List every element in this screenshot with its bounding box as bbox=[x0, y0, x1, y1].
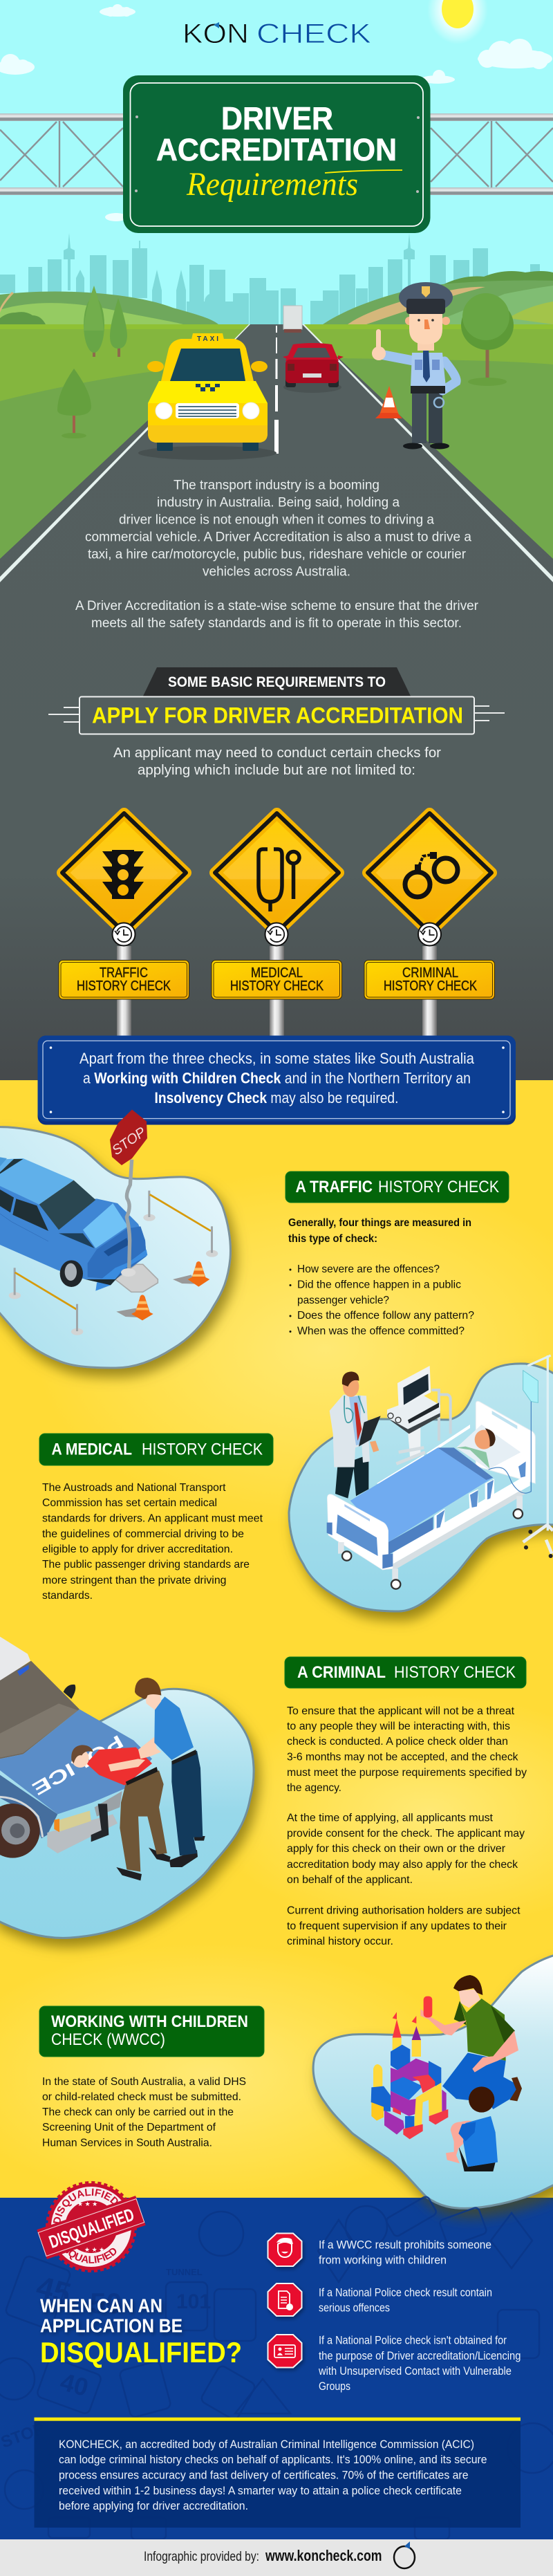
icon: document in stop octagon bbox=[268, 2283, 301, 2316]
footer: www.koncheck.com bbox=[265, 2547, 382, 2564]
criminal check text: apply for this check on their own or the driver bbox=[287, 1843, 506, 1855]
heading: working with children check bbox=[39, 2006, 264, 2057]
checks intro text bbox=[113, 745, 441, 778]
logo bbox=[182, 19, 371, 49]
traffic check text bbox=[288, 1217, 474, 1337]
heading: working with children check: WORKING WITH CHILDREN bbox=[51, 2012, 248, 2031]
plaque: medical history check: HISTORY CHECK bbox=[230, 979, 324, 994]
truck bbox=[283, 306, 302, 333]
disqualification reason 3: If a National Police check isn't obtained for bbox=[319, 2335, 507, 2347]
blue car bbox=[0, 1157, 147, 1291]
disqualification reason 1 bbox=[268, 2234, 491, 2266]
stamp banner: DISQUALIFIED bbox=[46, 2204, 137, 2252]
clock badge bbox=[112, 923, 135, 946]
intro text: The transport industry is a booming bbox=[174, 479, 379, 492]
disqualification reason 3: the purpose of Driver accreditation/Licencing bbox=[319, 2350, 521, 2362]
traffic check text: How severe are the offences? bbox=[297, 1263, 440, 1275]
criminal check text: the agency. bbox=[287, 1782, 341, 1794]
intro text bbox=[75, 479, 479, 631]
disqualified stamp: DISQUALIFIED bbox=[65, 2248, 116, 2263]
icon: traffic light bbox=[102, 850, 144, 899]
plaque: traffic history check: HISTORY CHECK bbox=[77, 979, 171, 994]
heading: medical history check bbox=[39, 1434, 273, 1465]
policeman bbox=[372, 282, 456, 450]
heading: some basic requirements: SOME BASIC REQUIREMENTS TO bbox=[168, 674, 386, 690]
scene: hospital bbox=[327, 1355, 553, 1589]
criminal check text: must meet the purpose requirements specified by bbox=[287, 1767, 527, 1779]
stop sign bbox=[109, 1109, 149, 1165]
hospital bed bbox=[327, 1401, 535, 1589]
sun bbox=[427, 0, 488, 44]
heading: apply for driver accreditation: APPLY FOR DRIVER ACCREDITATION bbox=[92, 703, 463, 728]
disqualification reason 1: from working with children bbox=[319, 2254, 447, 2266]
disqualification reason 2: If a National Police check result contain bbox=[319, 2286, 492, 2299]
heading: when can an application be disqualified: APPLICATION BE bbox=[40, 2315, 182, 2336]
medical check text: more stringent than the private driving bbox=[42, 1575, 227, 1586]
footer: Infographic provided by: bbox=[144, 2550, 259, 2564]
blue section background bbox=[0, 2198, 553, 2539]
banner text: Insolvency Check may also be required. bbox=[155, 1089, 398, 1106]
intro text: commercial vehicle. A Driver Accreditation is also a must to drive a bbox=[85, 530, 471, 545]
scene: police arrest bbox=[0, 1637, 205, 1880]
traffic check text: Generally, four things are measured in bbox=[288, 1217, 471, 1229]
title line: accreditation: ACCREDITATION bbox=[156, 132, 397, 167]
koncheck info panel bbox=[35, 2418, 521, 2528]
highway gantry truss bbox=[0, 113, 553, 195]
medical check text: The public passenger driving standards are bbox=[42, 1559, 250, 1570]
banner text bbox=[79, 1050, 475, 1106]
police car bbox=[0, 1637, 152, 1858]
taxi roof label: TAXI bbox=[197, 335, 218, 343]
barrier front bbox=[9, 1268, 83, 1335]
sign posts bbox=[117, 946, 437, 1036]
taxi bbox=[138, 333, 276, 460]
plaque: traffic history check: TRAFFIC bbox=[100, 965, 148, 981]
title sign bbox=[123, 75, 430, 233]
scene: crashed car bbox=[0, 1157, 218, 1335]
criminal blob bbox=[0, 1689, 254, 1938]
child bbox=[446, 2086, 498, 2171]
faint sign numbers bbox=[0, 2267, 211, 2452]
disqualification reason 2 bbox=[268, 2283, 492, 2316]
heading: when can an application be disqualified bbox=[40, 2295, 242, 2369]
children check text: The check can only be carried out in the bbox=[42, 2106, 234, 2118]
title line: driver: DRIVER bbox=[221, 100, 333, 136]
road sign pattern in blue section bbox=[0, 2196, 553, 2539]
stamp stars: ★ ★ ★ bbox=[84, 2246, 104, 2253]
barrier back bbox=[143, 1191, 218, 1257]
medical check text: Commission has set certain medical bbox=[42, 1497, 217, 1509]
criminal check text: criminal history occur. bbox=[287, 1936, 393, 1947]
faint sign numbers: 101 bbox=[176, 2290, 211, 2313]
faint sign numbers: 40 bbox=[57, 2367, 91, 2402]
medical check text: The Austroads and National Transport bbox=[42, 1482, 226, 1494]
building blocks castle bbox=[371, 2012, 448, 2139]
stamp stars: ★ ★ ★ bbox=[77, 2200, 97, 2207]
medical check text: the guidelines of commercial driving to be bbox=[42, 1528, 244, 1540]
heading: apply for driver accreditation bbox=[48, 697, 505, 734]
disqualification reason 2: serious offences bbox=[319, 2302, 390, 2315]
icon: ID card in stop octagon bbox=[268, 2335, 301, 2368]
police car: POLICE bbox=[29, 1731, 127, 1799]
clock badge bbox=[265, 923, 288, 946]
plaque: criminal history check: CRIMINAL bbox=[402, 965, 458, 981]
criminal check text: accreditation body may also apply for the check bbox=[287, 1859, 518, 1871]
rolling hills bbox=[0, 271, 553, 324]
disqualification reason 3 bbox=[268, 2335, 521, 2393]
title line: requirements script: Requirements bbox=[186, 166, 358, 203]
faint sign numbers: TUNNEL bbox=[166, 2267, 203, 2277]
criminal check text: to frequent supervision if any updates to their bbox=[287, 1920, 507, 1932]
road sign: traffic bbox=[62, 813, 186, 946]
children check text: In the state of South Australia, a valid DHS bbox=[42, 2076, 246, 2088]
icon: handcuffs bbox=[405, 852, 458, 897]
road surface bbox=[0, 324, 553, 1086]
checks intro text: applying which include but are not limited to: bbox=[138, 762, 415, 778]
logo arrowhead bbox=[214, 22, 219, 28]
trees bbox=[57, 286, 514, 438]
blue notice banner bbox=[37, 1036, 516, 1124]
plaque: criminal history check bbox=[364, 960, 495, 999]
patient monitor bbox=[387, 1366, 451, 1464]
banner text: a Working with Children Check and in the Northern Territory an bbox=[83, 1069, 471, 1087]
traffic check text: Does the offence follow any pattern? bbox=[297, 1310, 474, 1322]
icon: face in stop octagon bbox=[268, 2234, 301, 2266]
faint sign numbers: 50 bbox=[90, 2287, 122, 2319]
criminal check text: check is conducted. A police check older than bbox=[287, 1736, 508, 1748]
koncheck info panel: can lodge criminal history checks on behalf of applicants. It's 100% online, and its secure bbox=[59, 2454, 487, 2466]
script swash bbox=[325, 170, 402, 173]
heading: criminal history check bbox=[285, 1657, 526, 1688]
traffic cone bbox=[375, 386, 402, 418]
criminal check text: provide consent for the check. The applicant may bbox=[287, 1828, 525, 1840]
plaque: traffic history check bbox=[59, 960, 189, 999]
road sign: medical bbox=[215, 813, 339, 946]
heading: when can an application be disqualified: DISQUALIFIED? bbox=[40, 2336, 242, 2369]
traffic check text: When was the offence committed? bbox=[297, 1325, 465, 1337]
medical check text: eligible to apply for driver accreditation. bbox=[42, 1544, 233, 1555]
heading: medical history check: HISTORY CHECK bbox=[142, 1440, 263, 1459]
intro text: A Driver Accreditation is a state-wise scheme to ensure that the driver bbox=[75, 599, 479, 613]
children check text: or child-related check must be submitted. bbox=[42, 2091, 241, 2103]
intro text: driver licence is not enough when it comes to driving a bbox=[119, 513, 434, 527]
disqualification reason 3: Groups bbox=[319, 2380, 350, 2393]
road sign: criminal bbox=[368, 813, 491, 946]
criminal check text: to any people they will be interacting with, this bbox=[287, 1721, 510, 1732]
grass ground bbox=[0, 324, 553, 574]
medical check text bbox=[42, 1482, 263, 1602]
heading: some basic requirements bbox=[143, 667, 411, 696]
traffic check text: this type of check: bbox=[288, 1233, 377, 1245]
red car bbox=[283, 343, 344, 393]
cones bbox=[116, 1261, 209, 1320]
logo: KON: KON bbox=[182, 19, 249, 49]
arrested man bbox=[71, 1745, 171, 1880]
koncheck info panel: KONCHECK, an accredited body of Australian Criminal Intelligence Commission (ACIC) bbox=[59, 2438, 474, 2451]
children check text bbox=[42, 2076, 246, 2149]
children blob bbox=[313, 1954, 553, 2208]
koncheck info panel: process ensures accuracy and fast delivery of certificates. 70% of the certificates are bbox=[59, 2469, 469, 2481]
intro text: industry in Australia. Being said, holding a bbox=[157, 495, 400, 510]
heading: traffic history check: HISTORY CHECK bbox=[378, 1178, 499, 1196]
criminal check text bbox=[287, 1705, 527, 1947]
heading: traffic history check: A TRAFFIC bbox=[296, 1178, 373, 1196]
intro text: meets all the safety standards and is fit to operate in this sector. bbox=[91, 616, 462, 631]
plaque: criminal history check: HISTORY CHECK bbox=[384, 979, 478, 994]
base plate bbox=[115, 1264, 158, 1292]
checks intro text: An applicant may need to conduct certain checks for bbox=[113, 745, 441, 761]
medical check text: standards for drivers. An applicant must meet bbox=[42, 1513, 263, 1524]
heading: traffic history check bbox=[285, 1171, 509, 1203]
sky background bbox=[0, 0, 553, 328]
clock badge bbox=[418, 923, 441, 946]
yellow background bbox=[0, 1080, 553, 2206]
footer bbox=[0, 2539, 553, 2576]
koncheck info panel: before applying for driver accreditation. bbox=[59, 2500, 248, 2512]
medical blob bbox=[289, 1364, 553, 1611]
IV stand bbox=[523, 1355, 553, 1558]
clouds bbox=[0, 4, 552, 221]
traffic check text: passenger vehicle? bbox=[297, 1295, 389, 1306]
criminal check text: To ensure that the applicant will not be a threat bbox=[287, 1705, 515, 1717]
disqualification reason 3: with Unsupervised Contact with Vulnerable bbox=[318, 2365, 512, 2378]
scene: father and child with blocks bbox=[371, 1975, 522, 2171]
traffic blob bbox=[0, 1127, 230, 1368]
police officer bbox=[135, 1678, 205, 1867]
criminal check text: on behalf of the applicant. bbox=[287, 1874, 413, 1886]
bent sign pole bbox=[126, 1160, 132, 1270]
faint sign numbers: 45 bbox=[32, 2270, 74, 2311]
father bbox=[420, 1975, 522, 2109]
banner text: Apart from the three checks, in some states like South Australia bbox=[79, 1050, 475, 1067]
logo: CHECK: CHECK bbox=[256, 19, 371, 49]
disqualified stamp: DISQUALIFIED bbox=[53, 2188, 118, 2223]
heading: medical history check: A MEDICAL bbox=[51, 1440, 132, 1459]
disqualification reason 1: If a WWCC result prohibits someone bbox=[319, 2239, 491, 2251]
koncheck info panel: received within 1-2 business days! A smarter way to attain a police check certificate bbox=[59, 2485, 462, 2497]
children check text: Screening Unit of the Department of bbox=[42, 2122, 216, 2133]
criminal check text: Current driving authorisation holders are subject bbox=[287, 1905, 521, 1917]
heading: criminal history check: HISTORY CHECK bbox=[394, 1663, 516, 1682]
traffic check text: Did the offence happen in a public bbox=[297, 1279, 461, 1290]
disqualified stamp bbox=[37, 2181, 146, 2272]
intro text: taxi, a hire car/motorcycle, public bus, rideshare vehicle or courier bbox=[88, 548, 467, 562]
heading: criminal history check: A CRIMINAL bbox=[297, 1663, 386, 1682]
criminal check text: 3-6 months may not be accepted, and the check bbox=[287, 1751, 518, 1763]
doctor bbox=[330, 1371, 381, 1499]
skyline bbox=[0, 233, 540, 324]
criminal check text: At the time of applying, all applicants must bbox=[287, 1812, 494, 1824]
stamp banner bbox=[37, 2196, 145, 2259]
plaque: medical history check bbox=[212, 960, 341, 999]
intro text: vehicles across Australia. bbox=[203, 564, 350, 580]
medical check text: standards. bbox=[42, 1590, 93, 1602]
stamp stars bbox=[77, 2200, 104, 2253]
footer logo mark bbox=[394, 2541, 415, 2568]
stop sign: STOP bbox=[109, 1124, 149, 1158]
plaque: medical history check: MEDICAL bbox=[251, 965, 303, 981]
heading: when can an application be disqualified: WHEN CAN AN bbox=[40, 2295, 162, 2317]
road centre dashes bbox=[274, 326, 279, 454]
icon: stethoscope bbox=[259, 849, 299, 911]
road edge lines bbox=[0, 324, 553, 582]
children check text: Human Services in South Australia. bbox=[42, 2137, 212, 2149]
heading: working with children check: CHECK (WWCC) bbox=[51, 2030, 165, 2049]
